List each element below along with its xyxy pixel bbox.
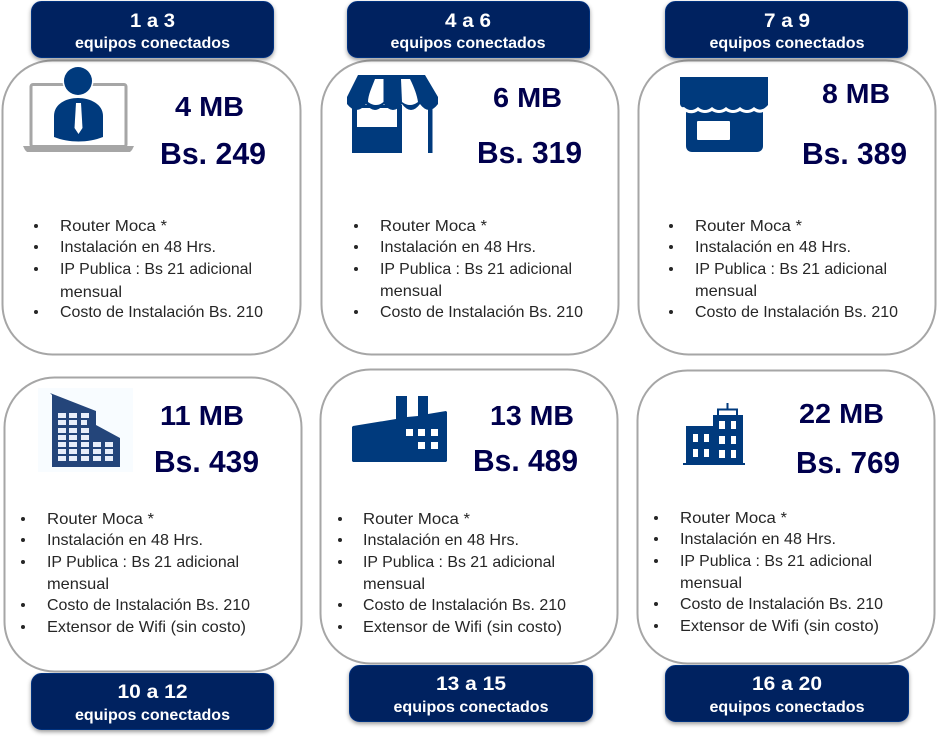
- feature list: Costo de Instalación Bs. 210: [60, 304, 263, 321]
- feature list: Costo de Instalación Bs. 210: [363, 597, 566, 614]
- feature list: Instalación en 48 Hrs.: [695, 239, 851, 256]
- label pill: 16 a 20: [666, 666, 908, 722]
- panel: plan 22 MB: [638, 370, 934, 664]
- feature list: mensual: [47, 576, 109, 593]
- feature list: Router Moca *: [380, 218, 487, 235]
- label pill: 13 a 15: [350, 666, 592, 722]
- label pill: 7 a 9: equipos conectados: [710, 35, 864, 52]
- heading: 8 MB: 8 MB: [822, 78, 890, 109]
- feature list: mensual: [380, 283, 442, 300]
- feature list: IP Publica : Bs 21 adicional: [363, 554, 555, 571]
- label pill: 4 a 6: equipos conectados: [390, 35, 546, 52]
- feature list: Extensor de Wifi (sin costo): [680, 618, 879, 635]
- feature list: Router Moca *: [363, 511, 470, 528]
- feature list: [338, 511, 566, 636]
- label pill: 1 a 3: 1 a 3: [130, 10, 175, 32]
- label pill: 7 a 9: 7 a 9: [764, 10, 810, 32]
- feature list: IP Publica : Bs 21 adicional: [60, 261, 252, 278]
- feature list: IP Publica : Bs 21 adicional: [695, 261, 887, 278]
- icon: storefront with awning: [347, 75, 438, 153]
- label pill: 10 a 12: [32, 674, 274, 730]
- label pill: 16 a 20: 16 a 20: [752, 673, 822, 695]
- icon: tall stepped building: [38, 388, 133, 472]
- panel: plan 11 MB: [4, 378, 302, 672]
- label pill: 16 a 20: equipos conectados: [710, 699, 864, 716]
- feature list: Instalación en 48 Hrs.: [380, 239, 536, 256]
- feature list: Extensor de Wifi (sin costo): [47, 619, 246, 636]
- heading: 4 MB: 4 MB: [175, 91, 244, 122]
- feature list: mensual: [60, 284, 122, 301]
- icon: person on laptop: [23, 66, 134, 152]
- heading: 6 MB: 6 MB: [493, 82, 562, 113]
- feature list: Costo de Instalación Bs. 210: [47, 597, 250, 614]
- label pill: 10 a 12: 10 a 12: [118, 681, 188, 703]
- feature list: Router Moca *: [680, 510, 787, 527]
- panel: plan 13 MB: [320, 370, 618, 664]
- feature list: mensual: [695, 283, 757, 300]
- label pill: 13 a 15: 13 a 15: [436, 673, 506, 695]
- label pill: 4 a 6: 4 a 6: [445, 10, 491, 32]
- feature list: IP Publica : Bs 21 adicional: [680, 553, 872, 570]
- price: Bs. 249: Bs. 249: [160, 136, 266, 171]
- feature list: Instalación en 48 Hrs.: [60, 239, 216, 256]
- price: Bs. 319: Bs. 319: [477, 135, 582, 170]
- icon: office building: [683, 403, 745, 465]
- heading: 11 MB: 11 MB: [160, 400, 244, 431]
- price: Bs. 389: Bs. 389: [802, 136, 907, 171]
- feature list: [654, 510, 883, 635]
- feature list: Extensor de Wifi (sin costo): [363, 619, 562, 636]
- panel: plan 8 MB: [638, 60, 936, 354]
- feature list: Instalación en 48 Hrs.: [47, 532, 203, 549]
- heading: 22 MB: 22 MB: [799, 398, 884, 429]
- feature list: [21, 511, 250, 636]
- feature list: Costo de Instalación Bs. 210: [680, 596, 883, 613]
- feature list: mensual: [363, 576, 425, 593]
- feature list: [354, 218, 583, 321]
- feature list: mensual: [680, 575, 742, 592]
- feature list: [669, 218, 898, 321]
- price: Bs. 439: Bs. 439: [154, 444, 259, 479]
- feature list: Costo de Instalación Bs. 210: [695, 304, 898, 321]
- icon: factory: [352, 396, 447, 462]
- feature list: Router Moca *: [60, 218, 167, 235]
- panel: plan 4 MB: [2, 60, 300, 354]
- feature list: IP Publica : Bs 21 adicional: [47, 554, 239, 571]
- feature list: IP Publica : Bs 21 adicional: [380, 261, 572, 278]
- label pill: 4 a 6: [348, 2, 590, 58]
- feature list: [34, 218, 263, 321]
- label pill: 7 a 9: [666, 2, 908, 58]
- feature list: Router Moca *: [695, 218, 802, 235]
- icon: small shop: [680, 77, 768, 152]
- feature list: Router Moca *: [47, 511, 154, 528]
- label pill: 1 a 3: [32, 2, 274, 58]
- feature list: Costo de Instalación Bs. 210: [380, 304, 583, 321]
- heading: 13 MB: 13 MB: [490, 400, 574, 431]
- panel: plan 6 MB: [322, 60, 618, 354]
- feature list: Instalación en 48 Hrs.: [363, 532, 519, 549]
- feature list: Instalación en 48 Hrs.: [680, 531, 836, 548]
- label pill: 1 a 3: equipos conectados: [75, 35, 230, 52]
- label pill: 10 a 12: equipos conectados: [75, 707, 230, 724]
- price: Bs. 489: Bs. 489: [473, 443, 578, 478]
- label pill: 13 a 15: equipos conectados: [394, 699, 548, 716]
- price: Bs. 769: Bs. 769: [796, 445, 900, 480]
